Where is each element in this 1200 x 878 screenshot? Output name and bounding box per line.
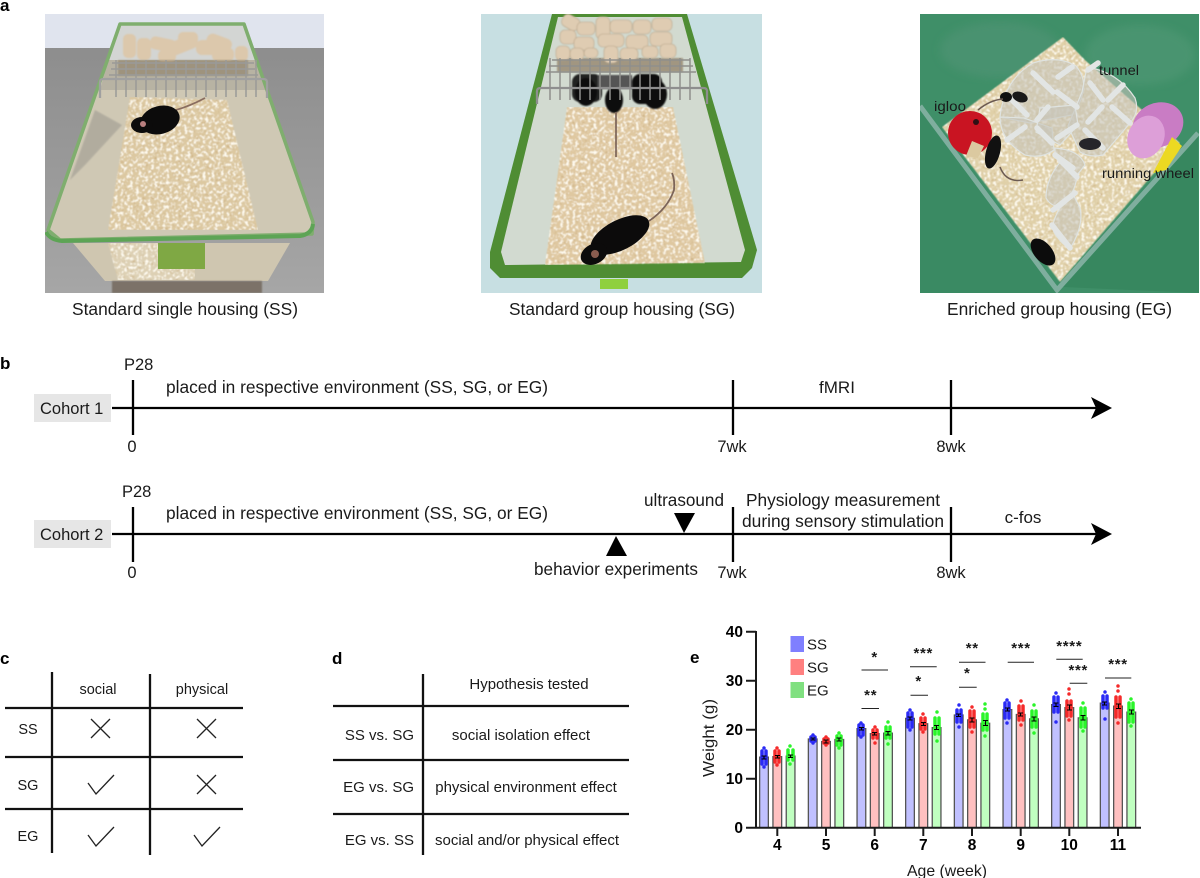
cohort 2 timeline: c-fos — [1005, 508, 1041, 527]
clear tunnel sections — [1000, 60, 1137, 247]
panel c: environment factor table: physical — [176, 682, 228, 698]
x axis labels: 11 — [1110, 837, 1127, 854]
cohort 2 label: Cohort 2 — [40, 526, 103, 544]
panel d: hypothesis table — [332, 649, 629, 855]
caption: SG: Standard group housing (SG) — [509, 299, 735, 319]
panel d: hypothesis table: EG vs. SS — [345, 832, 414, 849]
photo: enriched group housing with igloo, tunnel and running wheel — [920, 14, 1199, 293]
panel d: hypothesis table: social and/or physical effect — [435, 832, 620, 849]
food rack wires — [546, 58, 696, 100]
food pellets — [556, 12, 676, 63]
mice — [984, 136, 1002, 168]
data points: SS — [762, 692, 1107, 767]
cohort 1 timeline: 7wk — [717, 438, 747, 456]
significance stars: * — [871, 649, 878, 666]
marker: ultrasound — [674, 513, 695, 533]
significance stars: **** — [1056, 638, 1082, 655]
marker: behavior experiments — [606, 536, 627, 556]
significance stars: *** — [1068, 662, 1088, 679]
x axis labels: 6 — [870, 837, 879, 854]
panel c: environment factor table: SS — [18, 722, 38, 738]
cohort 1 timeline: placed in respective environment (SS, SG, or EG) — [166, 377, 548, 397]
x axis labels: 10 — [1061, 837, 1078, 854]
y axis labels: 0 — [734, 820, 743, 837]
x axis labels: 4 — [773, 837, 782, 854]
significance stars: ** — [966, 640, 979, 657]
panel c: environment factor table — [0, 649, 243, 855]
x axis labels: 8 — [968, 837, 977, 854]
panel b: experimental timelines — [0, 354, 1112, 582]
cohort 2 label — [34, 520, 111, 548]
significance stars: *** — [913, 645, 933, 662]
timeline arrow — [112, 380, 1096, 435]
table grid — [5, 672, 243, 855]
x axis labels — [773, 837, 1127, 854]
y axis labels: 10 — [726, 771, 743, 788]
significance stars: *** — [1108, 656, 1128, 673]
legend: SG — [807, 660, 829, 676]
table grid — [333, 674, 629, 855]
caption: EG: Enriched group housing (EG) — [947, 299, 1172, 319]
cohort 2 timeline: behavior experiments — [534, 559, 698, 579]
y axis labels: 40 — [726, 624, 743, 641]
cohort 1 timeline: 8wk — [936, 438, 966, 456]
significance stars: * — [915, 673, 922, 690]
cohort 1 timeline: 0 — [127, 438, 137, 456]
bars: EG — [786, 712, 1136, 828]
cohort 2 timeline: 0 — [127, 564, 137, 582]
food pellets — [123, 32, 248, 62]
cohort 2 timeline: 8wk — [936, 564, 966, 582]
panel c: environment factor table: EG — [18, 829, 38, 845]
panel letter d: d — [332, 649, 342, 668]
cohort 2 timeline: placed in respective environment (SS, SG, or EG) — [166, 503, 548, 523]
panel d: hypothesis table: Hypothesis tested — [469, 676, 589, 693]
cohort 1 timeline — [34, 356, 1112, 456]
significance brackets — [862, 659, 1131, 708]
bars: SS — [760, 703, 1109, 828]
panel letter b: b — [0, 354, 10, 373]
cohort 2 timeline — [34, 483, 1112, 582]
legend: EG — [807, 682, 829, 700]
timeline arrow — [112, 507, 1096, 562]
panel d: hypothesis table: social isolation effect — [452, 727, 591, 744]
label: tunnel: tunnel — [1099, 62, 1139, 78]
y axis labels: 30 — [726, 673, 743, 690]
panel a: housing photographs — [0, 0, 1199, 319]
panel e: weight bar chart — [690, 624, 1141, 878]
means and error bars — [762, 702, 1134, 759]
running wheel — [1133, 102, 1184, 148]
y axis title: Weight (g) — [701, 699, 718, 777]
bars: SG — [773, 706, 1122, 828]
cohort 2 timeline: P28 — [122, 483, 151, 501]
x axis labels: 5 — [822, 837, 831, 854]
photo: standard single housing cage — [45, 14, 324, 293]
significance stars — [864, 638, 1128, 704]
panel d: hypothesis table: EG vs. SG — [343, 779, 414, 796]
igloo — [948, 111, 992, 155]
cohort 1 label: Cohort 1 — [40, 400, 103, 418]
x axis labels: 9 — [1016, 837, 1025, 854]
panel c: environment factor table: SG — [18, 778, 38, 794]
cohort 1 label — [34, 394, 111, 422]
label: igloo: igloo — [934, 98, 966, 114]
significance stars: ** — [864, 687, 877, 704]
panel letter c: c — [0, 649, 9, 668]
y axis labels: 20 — [726, 722, 743, 739]
cohort 2 timeline: 7wk — [717, 564, 747, 582]
mice behind rack — [572, 74, 667, 113]
caption: SS: Standard single housing (SS) — [72, 299, 298, 319]
axes — [746, 631, 1141, 836]
food rack wires — [109, 60, 258, 97]
label: running wheel: running wheel — [1102, 165, 1194, 181]
data points: EG — [788, 699, 1133, 764]
panel d: hypothesis table: physical environment effect — [435, 779, 618, 796]
panel letter e: e — [690, 648, 699, 667]
x axis labels: 7 — [919, 837, 928, 854]
cohort 1 timeline: P28 — [124, 356, 153, 374]
photo: standard group housing cage — [481, 12, 762, 293]
cohort 2 timeline: ultrasound — [644, 490, 724, 510]
cohort 2 timeline: Physiology measurement — [746, 490, 940, 510]
panel d: hypothesis table: SS vs. SG — [345, 727, 414, 744]
cohort 2 timeline: during sensory stimulation — [742, 511, 944, 531]
significance stars: * — [964, 665, 971, 682]
data points: SG — [775, 686, 1120, 765]
y axis labels — [726, 624, 743, 837]
tunnel connector collars — [1007, 63, 1130, 248]
table marks: crosses and checks — [88, 719, 220, 846]
cohort 1 timeline: fMRI — [819, 378, 855, 397]
significance stars: *** — [1011, 640, 1031, 657]
legend — [790, 636, 829, 700]
panel c: environment factor table: social — [79, 682, 117, 698]
legend: SS — [807, 636, 827, 654]
